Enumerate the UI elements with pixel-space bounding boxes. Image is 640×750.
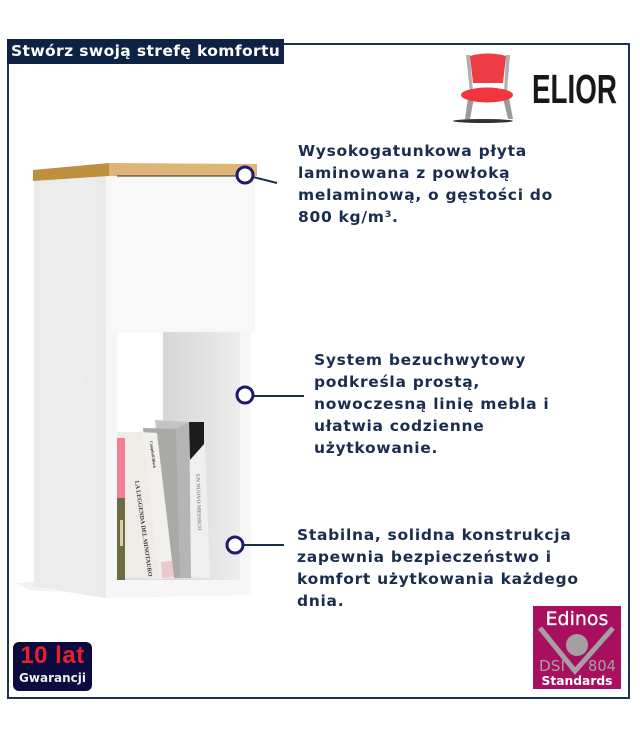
badge: 10 years warranty: Gwarancji [19,671,86,685]
badge: Edinos standards: DSI [539,657,565,675]
text block: handleless system [314,351,549,457]
icon: red chair [453,54,513,123]
cabinet door [110,176,254,332]
badge: Edinos standards: Edinos [546,608,608,630]
text block: handleless system: nowoczesną linię mebla i [314,395,549,413]
badge: 10 years warranty [13,642,92,691]
title [7,39,284,64]
logo: Elior [453,54,617,123]
books [117,420,210,580]
marker: middle [237,387,304,403]
wooden top [33,163,257,181]
marker: bottom [227,537,284,553]
text block: construction: dnia. [297,592,344,610]
book spine text [133,441,202,577]
text block: handleless system: System bezuchwytowy [314,351,526,369]
badge: Edinos standards [533,606,621,689]
book spine text: UN NUOVO MESSICO [194,474,202,531]
text block: board: laminowana z powłoką [298,164,510,182]
text block: construction: zapewnia bezpieczeństwo i [297,548,552,566]
cabinet side panel [34,176,106,598]
text block: handleless system: ułatwia codzienne [314,417,484,435]
text block: board: 800 kg/m³. [298,208,399,226]
text block: board: Wysokogatunkowa płyta [298,142,527,160]
text block: handleless system: użytkowanie. [314,439,438,457]
text block: board [298,142,553,226]
marker: top [237,167,277,183]
cabinet front frame [106,176,251,598]
book spine text: LA LEGGENDA DEL MINOTAURO [133,480,152,577]
open compartment [117,332,240,580]
text block: construction [297,526,579,610]
badge: Edinos standards: Standards [542,674,612,688]
book spine text: Campbell Black [149,441,157,469]
badge: 10 years warranty: 10 lat [20,642,85,669]
text block: board: melaminową, o gęstości do [298,186,553,204]
badge: Edinos standards: 804 [588,657,616,675]
text block: construction: Stabilna, solidna konstrukcja [297,526,571,544]
floor shadow [16,582,60,592]
text block: construction: komfort użytkowania każdego [297,570,579,588]
text block: handleless system: podkreśla prostą, [314,373,480,391]
title: Stwórz swoją strefę komfortu [11,42,280,60]
